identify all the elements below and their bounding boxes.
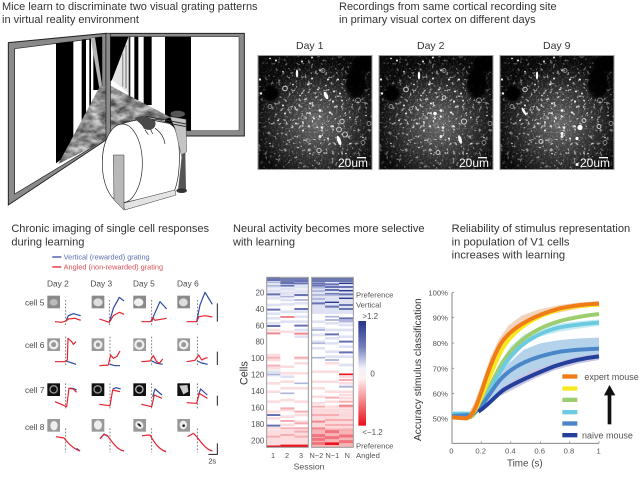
axes: Time (s) [507,458,543,469]
colour scale: 0 [370,370,375,379]
panel: stimulus classification chart [428,223,639,469]
heading [452,223,630,262]
mouse [135,117,165,144]
heatmap axes: 100 [251,354,265,363]
heading [232,223,425,248]
panel: day 1 recording [258,40,376,170]
pale pink bands [267,330,353,440]
accuracy curves [452,304,599,418]
panel: chronic imaging [11,223,217,466]
heading: Reliability of stimulus representation [452,223,630,235]
heading: increases with learning [452,250,565,262]
post and head bar [145,111,187,193]
colour scale: <−1.2 [362,428,383,437]
heatmap axes: 200 [251,436,265,445]
preference labels: Preference [356,291,393,300]
column and row labels: Day 2 [47,279,69,289]
legend: Vertical (rewarded) grating [64,252,150,261]
column and row labels [25,279,199,432]
panel: chronic imaging: 2s [208,457,216,466]
panel: day 2 recording: Day 2 [417,40,445,52]
bracket [113,155,176,210]
preference labels: Angled [356,451,380,460]
heading: in population of V1 cells [452,236,570,248]
title: virtual reality task: Mice learn to discriminate two visual grating patterns [2,1,258,13]
panel: day 9 recording: Day 9 [543,40,571,52]
strong response rows [312,432,353,443]
cell thumbnails [47,296,190,432]
dark and mid stripes [267,278,353,437]
panel: neural selectivity heatmap [232,223,425,472]
axes: 90% [433,313,448,322]
y axis label: accuracy: Accuracy stimulus classification [413,298,424,441]
learning legend: expert mouse [584,372,639,382]
column and row labels: Day 6 [177,279,199,289]
scale bars [208,303,217,454]
confidence bands [452,301,599,420]
panel: neural selectivity heatmap: Session [294,462,325,472]
preference labels: Vertical [356,300,381,309]
left screen [8,33,106,205]
stimulus onset markers [66,300,197,452]
column and row labels: Day 3 [90,279,112,289]
heatmap axes: 20 [255,288,265,297]
heading: Neural activity becomes more selective [233,223,425,235]
axes: 0.4 [505,446,516,455]
axes [428,289,601,469]
panel: neural selectivity heatmap: 3 [299,451,303,460]
pale blue bands [267,287,353,387]
preference labels: Preference [356,441,393,450]
heading: during learning [11,236,84,248]
axes: 60% [433,389,448,398]
heading: with learning [232,236,295,248]
illustration: mouse on wheel in virtual reality [8,33,244,210]
axes: 50% [433,414,448,423]
panel: neural selectivity heatmap: N−2 [310,451,323,460]
panel: neural selectivity heatmap: N−1 [326,451,339,460]
column and row labels: cell 5 [25,297,45,307]
legend [52,252,163,271]
vertical grating traces [66,292,212,452]
panel: neural selectivity heatmap: Cells [239,361,251,385]
column and row labels: Day 5 [133,279,155,289]
heading: Chronic imaging of single cell responses [11,223,210,235]
axes: 1 [597,446,601,455]
heatmap axes: 120 [251,370,265,379]
title: recordings: Recordings from same cortical recording site [339,1,557,13]
heatmap axes: 140 [251,387,265,396]
legend: Angled (non-rewarded) grating [64,262,163,271]
panel: day 1 recording: Day 1 [296,40,324,52]
colour scale: >1.2 [362,312,379,321]
heatmap axes: 40 [255,305,265,314]
axes: 80% [433,339,448,348]
axes: 0 [449,446,453,455]
right screen [106,33,244,140]
column and row labels: cell 7 [25,385,45,395]
title: recordings [339,1,557,26]
axes: 0.6 [534,446,545,455]
wheel [102,119,179,203]
learning legend [562,372,639,441]
panel: day 2 recording: 20um [459,156,489,170]
column and row labels: cell 6 [25,340,45,350]
title: virtual reality task [2,1,258,26]
heatmap [267,277,353,447]
title: virtual reality task: in virtual reality environment [2,14,139,26]
preference labels [356,291,393,460]
heatmap axes: 80 [255,338,265,347]
angled grating traces [55,312,212,452]
center frame post [106,33,110,143]
axes: 0.8 [564,446,574,455]
panel: day 2 recording [379,40,497,170]
panel: day 9 recording: 20um [580,156,610,170]
axes: 70% [433,364,448,373]
colour scale [358,312,383,437]
panel: day 1 recording: 20um [338,156,368,170]
panel: neural selectivity heatmap: 2 [285,451,289,460]
title: recordings: in primary visual cortex on different days [339,14,536,26]
column and row labels: cell 8 [25,422,45,432]
panel: day 9 recording [500,40,618,170]
panel: neural selectivity heatmap: 1 [271,451,275,460]
heatmap axes [251,288,265,445]
panel: neural selectivity heatmap: N [345,451,350,460]
axes: 0.2 [475,446,486,455]
heatmap axes: 180 [251,420,265,429]
heatmap axes: 60 [255,322,265,331]
heading [11,223,210,248]
heatmap axes: 160 [251,403,265,412]
learning legend: naive mouse [582,431,633,441]
arrow: naive to expert [604,385,615,424]
axes: 100% [428,289,448,298]
